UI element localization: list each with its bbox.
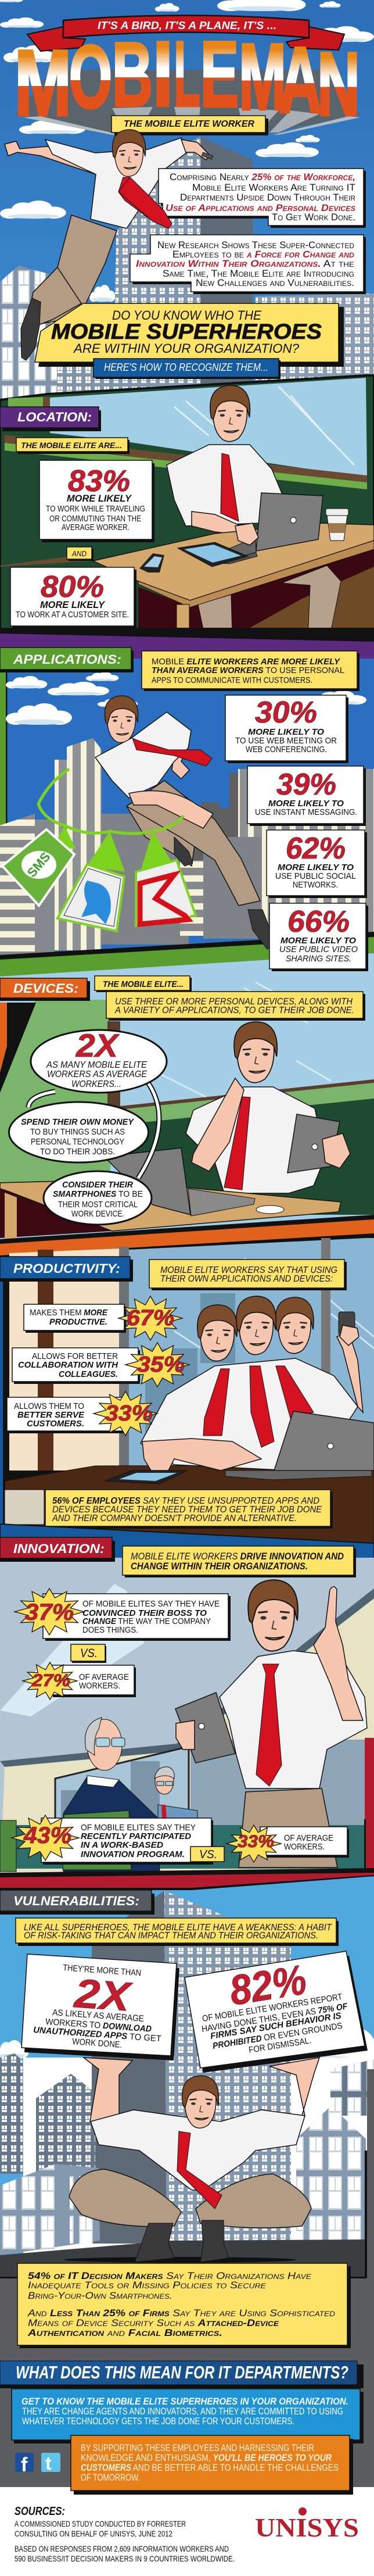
icon: twitter [57,864,124,931]
callout: decision makers [17,2263,351,2348]
stat: 37% convinced boss: CONVINCED THEIR BOSS TO [82,1608,207,1618]
stat box: 83%: 83% [68,464,130,498]
stat: 33% average workers: WORKERS. [284,1842,325,1852]
sign: 2x as likely: THEY'RE MORE THAN [63,1963,142,1978]
caption: the mobile elite: THE MOBILE ELITE... [103,979,184,989]
stat box: 30%: TO USE WEB MEETING OR [235,736,337,746]
sources: BASED ON RESPONSES FROM 2,609 INFORMATION WORKERS AND [15,2544,229,2553]
headline panel: mobile superheroes: MOBILE SUPERHEROES [51,320,322,344]
title: MOBILEMAN logo: M [239,25,286,130]
caption: and [67,547,94,561]
illustration: man at table [93,385,374,635]
sign: 82%: HAVING DONE THIS, EVEN AS 75% OF [201,2001,348,2034]
illustration: pointing man [175,1580,367,1867]
section label: applications: APPLICATIONS: [13,652,121,667]
stat: 35% [12,1343,189,1387]
stat box: 30%: WEB CONFERENCING. [246,745,327,754]
sign: 82%: OF MOBILE ELITE WORKERS REPORT [202,1992,343,2024]
stat box: 62%: MORE LIKELY TO [278,863,354,872]
section label: devices [0,978,90,1001]
stat: 33% [7,1391,157,1436]
stat: 27% average workers: 27% [31,1671,70,1690]
stat box: 80% [10,567,136,628]
text block: intro copy 1: Mobile Elite Workers Are Turning IT [192,182,355,193]
title ribbon [27,15,344,51]
stat box: 62%: NETWORKS. [293,880,338,890]
callout: devices intro: USE THREE OR MORE PERSONAL DEVICES, ALONG WITH [115,997,353,1007]
stat box: 80%: TO WORK AT A CUSTOMER SITE. [16,610,129,620]
illustration: three-headed man [105,1296,374,1484]
text block: intro copy 1: Use of Applications and Personal Devices [166,202,355,213]
title: MOBILEMAN logo: L [174,23,200,126]
stat box: 80%: 80% [41,570,104,604]
callout: devices intro [106,992,365,1021]
headline panel: mobile superheroes: DO YOU KNOW WHO THE [112,308,261,323]
sources: SOURCES: [15,2505,65,2518]
panel: applications [0,628,374,978]
stat: 33%: CUSTOMERS. [27,1419,84,1429]
sign: 82% [185,1951,368,2073]
stat: 67%: MAKES THEM MORE [30,1308,108,1318]
stat box: 83%: AVERAGE WORKER. [62,523,130,532]
text block: intro copy 1: Comprising Nearly 25% of the Workforce, [170,171,355,183]
text block: blue recommendation [12,2389,364,2443]
panel: vulnerabilities [0,1868,374,2488]
panel: innovation [0,1524,374,1877]
title: MOBILEMAN logo: O [69,27,112,127]
icon: sms [2,829,74,906]
sign: 82%: FOR DISMISSAL. [248,2035,312,2055]
caption: vs [71,1644,106,1663]
banner: here's how to recognize them: HERE'S HOW TO RECOGNIZE THEM... [104,362,268,373]
panel: productivity [0,1215,374,1546]
stat: 27% average workers: WORKERS. [79,1681,120,1691]
callout: decision makers: Means of Device Security Such as Attached-Device [28,2317,279,2328]
icon: facebook [15,2453,34,2476]
speech bubble: smartphones: THEIR MOST CRITICAL [58,1200,138,1210]
stat box: 83%: MORE LIKELY [67,493,132,504]
illustration: running man [95,696,276,949]
callout: 56% of employees [45,1490,333,1529]
icon: sms: SMS [24,849,53,880]
speech bubble: smartphones: SMARTPHONES TO BE [53,1189,143,1199]
stat box: 62%: USE PUBLIC SOCIAL [275,871,356,881]
stat: 33% average workers: 33% [238,1832,274,1851]
stat box: 39% [247,766,366,826]
text block: intro copy 1 [118,169,366,228]
callout: 56% of employees: DEVICES BECAUSE THEY NEED THEM TO GET THEIR JOB DONE [52,1505,322,1515]
illustration: older bosses [0,1718,197,1872]
stat: 27% average workers: OF AVERAGE [79,1672,129,1682]
callout: applications intro: MOBILE ELITE WORKERS ARE MORE LIKELY [152,657,341,667]
callout: 56% of employees: 56% OF EMPLOYEES SAY THEY USE UNSUPPORTED APPS AND [52,1496,319,1506]
text block: orange recommendation: KNOWLEDGE AND ENTHUSIASM, YOU'LL BE HEROES TO YOUR [81,2452,332,2463]
callout: decision makers: Inadequate Tools or Missing Policies to Secure [28,2280,267,2291]
stat box: 66% [269,903,368,971]
stat box: 83%: TO WORK WHILE TRAVELING [46,504,145,514]
headline panel: mobile superheroes [21,267,344,367]
stat: 33%: ALLOWS THEM TO [14,1401,84,1411]
sources: 590 BUSINESS/IT DECISION MAKERS IN 9 COUNTRIES WORLDWIDE. [15,2554,235,2563]
section label: productivity [0,1257,133,1282]
sign: 82%: FIRMS SAY SUCH BEHAVIOR IS [210,2010,342,2041]
text block: orange recommendation: OF TOMORROW. [81,2472,140,2483]
stat: 35%: COLLABORATION WITH [18,1360,118,1370]
text block: intro copy 2: Innovation Within Their Organizations. At the [136,258,354,269]
stat: 37% convinced boss: 37% [25,1600,74,1625]
stat: 67%: 67% [127,1306,174,1330]
speech bubble: spend their own money: TO DO THEIR JOBS. [40,1147,115,1157]
illustration: man lifting signs [69,2058,319,2262]
text block: intro copy 1: To Get Work Done. [272,212,355,223]
stat: 27% average workers [23,1662,136,1700]
section label: innovation [0,1537,115,1562]
subtitle banner [112,116,268,135]
stat box: 30%: MORE LIKELY TO [248,727,324,737]
caption: the mobile elite are: THE MOBILE ELITE ARE... [21,441,122,450]
speech bubble: 2x: WORKERS... [71,1079,121,1089]
panel: location [0,375,374,639]
speech bubble: spend their own money: SPEND THEIR OWN MONEY [21,1117,135,1127]
sources: A COMMISSIONED STUDY CONDUCTED BY FORRESTER [15,2519,186,2528]
callout: 56% of employees: AND THEIR COMPANY DOESN'T PROVIDE AN ALTERNATIVE. [52,1514,297,1523]
title: MOBILEMAN logo: I [153,23,173,126]
caption: the mobile elite are [16,438,130,454]
stat: 35%: 35% [137,1353,185,1377]
stat box: 83%: OR COMMUTING THAN THE [49,514,141,524]
caption: vs 2 [190,1847,224,1862]
caption: and: AND [71,549,87,558]
callout: applications intro: THAN AVERAGE WORKERS TO USE PERSONAL [152,666,344,675]
callout: vulnerabilities intro [16,1918,339,1946]
sign: 2x as likely: WORKERS TO DOWNLOAD [45,2017,152,2034]
stat: 43% innovation program: 43% [23,1823,71,1848]
stat box: 66%: USE PUBLIC VIDEO [279,944,358,954]
title: MOBILEMAN logo: B [112,23,153,126]
callout: productivity intro [149,1260,347,1290]
speech bubble: spend their own money [9,1102,149,1162]
section label: applications [0,647,134,672]
callout: decision makers: Bring-Your-Own Smartphones. [28,2290,172,2301]
icon: twitter badge: t [45,2453,52,2474]
section label: productivity: PRODUCTIVITY: [13,1261,120,1276]
callout: devices intro: A VARIETY OF APPLICATIONS, TO GET THEIR JOB DONE. [114,1006,354,1015]
section label: location [0,407,101,431]
icon group: app icons on slime [2,769,196,931]
callout: decision makers: And Less Than 25% of Firms Say They are Using Sophisticated [27,2307,335,2319]
banner: here's how to recognize them [94,359,280,379]
callout: decision makers: Authentication and Facial Biometrics. [27,2327,222,2338]
sign: 2x as likely: 2X [72,1970,134,2020]
bottom white area [0,2487,374,2576]
callout: innovation intro: MOBILE ELITE WORKERS DRIVE INNOVATION AND [131,1551,344,1562]
callout: productivity intro: THEIR OWN APPLICATIONS AND DEVICES: [160,1274,333,1284]
stat: 37% convinced boss: CHANGE THE WAY THE COMPANY [82,1616,211,1626]
speech bubble: 2x: 2X [75,1027,120,1064]
text block: intro copy 1: Departments Upside Down Through Their [180,192,355,203]
speech bubble: 2x [31,1027,167,1093]
section label: vulnerabilities: VULNERABILITIES: [13,1894,139,1908]
panel: devices [0,953,374,1244]
stat box: 80%: MORE LIKELY [40,599,106,610]
text block: intro copy 2: New Challenges and Vulnerabilities. [196,277,354,288]
title: MOBILEMAN logo: A [279,27,322,133]
stat: 43% innovation program: INNOVATION PROGRAM. [81,1849,185,1859]
speech bubble: 2x: WORKERS AS AVERAGE [47,1069,147,1079]
callout: vulnerabilities intro: OF RISK-TAKING THAT CAN IMPACT THEM AND THEIR ORGANIZATIONS. [24,1931,318,1941]
sign: 2x as likely [21,1954,179,2060]
text block: blue recommendation: WHATEVER TECHNOLOGY GETS THE JOB DONE FOR YOUR CUSTOMERS. [22,2416,294,2427]
stat: 67%: PRODUCTIVE. [49,1317,107,1327]
sign: 2x as likely: WORK DONE. [72,2037,123,2050]
stat box: 66%: MORE LIKELY TO [280,936,356,946]
caption: vs 2: VS. [199,1848,217,1861]
callout: applications intro: APPS TO COMMUNICATE WITH CUSTOMERS. [152,675,312,685]
stat box: 66%: 66% [287,905,350,939]
subtitle banner: THE MOBILE ELITE WORKER [124,119,254,129]
stat: 37% convinced boss [15,1588,231,1641]
sources: CONSULTING ON BEHALF OF UNISYS, JUNE 2012 [15,2529,172,2538]
sign: 82%: PROHIBITED OR EVEN GROUNDS [212,2021,343,2051]
stat box: 39%: MORE LIKELY TO [268,799,344,808]
speech bubble: smartphones: CONSIDER THEIR [62,1180,133,1190]
illustration: man on phone [0,1022,350,1231]
callout: innovation intro: CHANGE WITHIN THEIR ORGANIZATIONS. [131,1561,308,1572]
stat box: 30% [225,695,348,763]
heading: what does this mean [0,2361,364,2388]
title: MOBILEMAN logo [15,23,360,135]
speech bubble: 2x: AS MANY MOBILE ELITE [46,1060,147,1070]
section label: innovation: INNOVATION: [13,1541,105,1556]
stat: 35%: COLLEAGUES. [59,1369,118,1379]
sources [15,2505,235,2563]
stat: 33%: 33% [105,1401,153,1426]
sign: 82%: 82% [226,1956,310,2015]
text block: intro copy 2: Employees to be a Force for Change and [172,249,354,260]
speech bubble: spend their own money: TO BUY THINGS SUCH AS [30,1127,125,1137]
callout: vulnerabilities intro: LIKE ALL SUPERHEROES, THE MOBILE ELITE HAVE A WEAKNESS: A HABIT [24,1923,332,1933]
stat: 33% average workers: OF AVERAGE [284,1833,333,1843]
stat: 43% innovation program: IN A WORK-BASED [81,1840,163,1850]
speech bubble: spend their own money: PERSONAL TECHNOLOGY [31,1137,124,1147]
title: MOBILEMAN logo: E [200,23,239,127]
title: MOBILEMAN logo: N [317,33,360,134]
section label: devices: DEVICES: [13,981,78,996]
stat: 43% innovation program: OF MOBILE ELITES SAY THEY [81,1823,196,1833]
speech bubble: smartphones [44,1171,152,1225]
stat: 33%: BETTER SERVE [17,1410,85,1420]
title: MOBILEMAN logo: M [15,31,71,135]
text block: intro copy 2: New Research Shows These Super-Connected [157,239,354,251]
hero panel: sky and city [0,0,374,418]
title ribbon: IT'S A BIRD, IT'S A PLANE, IT'S ... [98,20,276,31]
stat box: 62% [267,830,367,898]
stat: 37% convinced boss: OF MOBILE ELITES SAY THEY HAVE [82,1599,220,1609]
stat box: 39%: USE INSTANT MESSAGING. [255,807,357,817]
icon: twitter badge [41,2453,60,2474]
stat box: 39%: 39% [276,768,336,802]
callout: applications intro [142,651,359,691]
speech bubble connectors [28,1083,159,1178]
section label: location: LOCATION: [17,410,92,424]
stat: 67% [24,1296,182,1340]
stat: 43% innovation program: RECENTLY PARTICIPATED [81,1831,191,1841]
callout: decision makers: 54% of IT Decision Makers Say Their Organizations Have [28,2270,312,2281]
stat: 33% average workers [226,1825,349,1862]
icon: mail [136,860,196,926]
icon: facebook: f [21,2454,28,2476]
caption: the mobile elite [95,976,192,992]
headline panel: mobile superheroes: ARE WITHIN YOUR ORGANIZATION? [73,341,300,356]
stat: 43% innovation program [12,1815,213,1865]
stat box: 62%: 62% [286,832,346,865]
speech bubble: smartphones: WORK DEVICE. [71,1209,124,1219]
sign: 2x as likely: UNAUTHORIZED APPS TO GET [33,2025,161,2044]
stat: 37% convinced boss: DOES THINGS. [82,1625,138,1635]
stat box: 83% [39,460,154,542]
stat box: 66%: SHARING SITES. [286,954,351,964]
caption: vs: VS. [80,1647,98,1660]
text block: orange recommendation [71,2435,353,2495]
text block: intro copy 2 [130,235,366,294]
sign: 2x as likely: AS LIKELY AS AVERAGE [52,2008,145,2024]
callout: productivity intro: MOBILE ELITE WORKERS SAY THAT USING [160,1265,337,1275]
illustration: flying mobile man [5,130,213,360]
stat: 35%: ALLOWS FOR BETTER [32,1351,118,1361]
stat box: 30%: 30% [255,696,317,729]
callout: innovation intro [123,1546,356,1577]
text block: intro copy 2: Same Time, The Mobile Elite are Introducing [163,268,354,279]
section label: vulnerabilities [0,1890,154,1915]
logo: unisys: UNISYS [255,2513,359,2542]
